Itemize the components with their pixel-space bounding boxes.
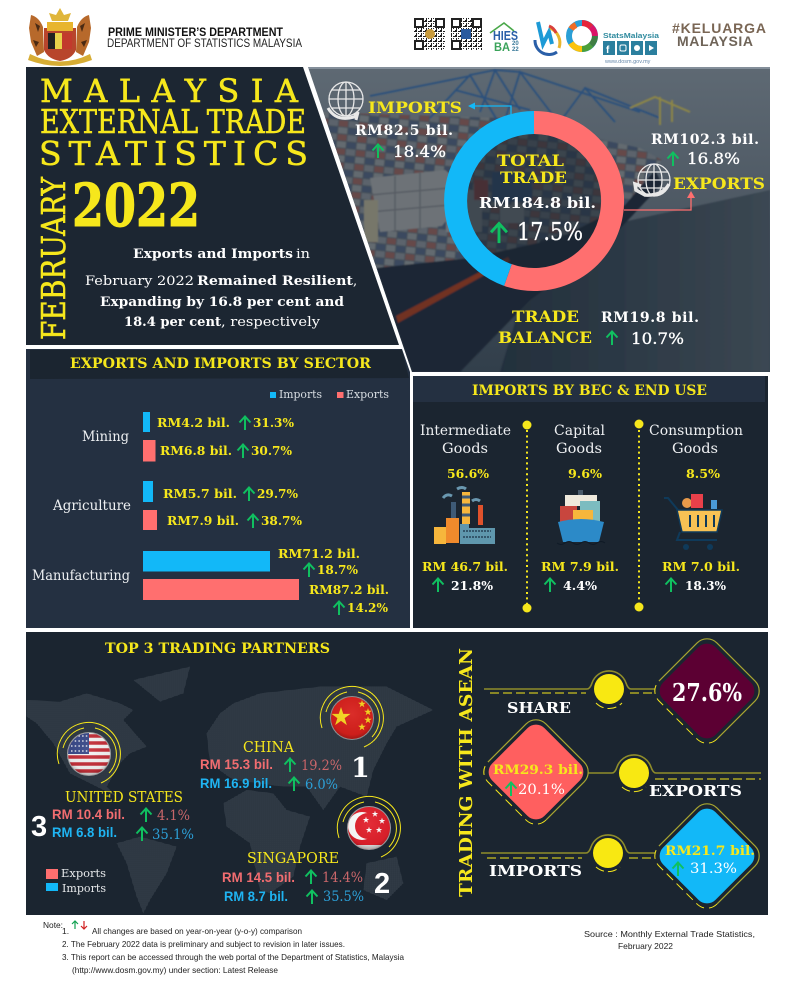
icon: cargo ship: [557, 490, 605, 544]
arrow: imports connector: [468, 102, 511, 116]
text block: hero summary: Expanding by 16.8 per cent and: [100, 295, 344, 310]
bar chart: manufacturing: RM71.2 bil.: [278, 547, 360, 561]
sector header band: [30, 350, 409, 379]
legend: exports and imports: Imports: [62, 882, 106, 895]
icon: Singapore flag: [337, 796, 400, 857]
panel: hero title background: [26, 67, 399, 345]
text block: trade balance: [498, 307, 699, 348]
text block: trade balance: TRADE: [512, 307, 579, 326]
text block: source: [584, 929, 755, 951]
heading: top 3 trading partners: TOP 3 TRADING PARTNERS: [105, 641, 330, 657]
chart: total trade donut: [456, 122, 613, 279]
divider 2: [634, 420, 644, 612]
text block: China: 6.0%: [305, 777, 338, 793]
text block: trade balance: BALANCE: [498, 328, 592, 347]
BEC heading: IMPORTS BY BEC & END USE: [472, 383, 707, 399]
text block: United States: 3: [31, 811, 47, 843]
text block: notes: All changes are based on year-on-year (y-o-y) comparison: [92, 926, 302, 936]
text block: Singapore: SINGAPORE: [247, 851, 339, 867]
title: Malaysia external trade statistics: STATISTICS: [39, 134, 308, 173]
icon: China flag: [320, 686, 383, 747]
title: year 2022: 2022: [72, 171, 200, 240]
text block: United States: RM 10.4 bil.: [52, 806, 125, 822]
column: consumption goods: RM 7.0 bil.: [662, 559, 740, 574]
column: capital goods: [541, 423, 619, 593]
column: intermediate goods: Intermediate: [420, 423, 511, 439]
header: QR code 1: [414, 18, 445, 50]
bar chart: manufacturing: RM87.2 bil.: [309, 583, 389, 597]
bar chart: manufacturing: [143, 547, 389, 615]
text block: Singapore: 14.4%: [322, 870, 363, 886]
bar chart: mining: 31.3%: [253, 416, 295, 430]
sector category labels: [32, 429, 131, 584]
ASEAN: imports row: RM21.7 bil.: [665, 844, 755, 859]
header: Keluarga Malaysia logo: [672, 20, 766, 49]
text block: source: Source : Monthly External Trade Statistics,: [584, 929, 755, 939]
text block: notes: Note:: [43, 920, 63, 930]
arrow: exports connector: [624, 191, 695, 210]
text block: notes: [43, 920, 404, 975]
column: capital goods: RM 7.9 bil.: [541, 559, 619, 574]
header: HIES BA logo: BA: [494, 40, 510, 54]
ASEAN: share row: SHARE: [507, 699, 571, 717]
column: consumption goods: Consumption: [649, 423, 743, 439]
text block: China: RM 15.3 bil.: [200, 756, 273, 772]
bar chart: agriculture: 38.7%: [261, 514, 303, 528]
text block: notes: 3. This report can be accessed through the web portal of the Department of Statistics, Malaysia: [62, 952, 404, 962]
title: February vertical label: FEBRUARY: [34, 176, 73, 340]
text block: United States: 4.1%: [157, 808, 190, 824]
bar chart: manufacturing: 14.2%: [347, 601, 389, 615]
ASEAN: imports row: [481, 798, 765, 914]
bar chart: agriculture: RM7.9 bil.: [167, 514, 239, 528]
text block: China: 1: [351, 753, 370, 784]
header: StatsMalaysia social logo: [603, 33, 659, 65]
text block: United States: [31, 790, 194, 843]
divider 1: [522, 420, 532, 612]
header: QR code 2: [451, 18, 482, 50]
header: StatsMalaysia social logo: f: [606, 45, 610, 56]
text block: exports value: [651, 132, 765, 193]
text block: Singapore: 2: [374, 868, 390, 900]
ASEAN: share row: [484, 633, 765, 749]
icon: factory: [434, 488, 495, 544]
header: HIES BA logo: 20: [512, 41, 519, 47]
column: capital goods: Capital: [554, 423, 605, 439]
text block: hero summary: in: [296, 247, 311, 262]
column: capital goods: 9.6%: [568, 466, 602, 481]
text block: China: 19.2%: [301, 758, 342, 774]
bar chart: mining: [143, 412, 295, 462]
text block: hero summary: ,: [353, 274, 357, 289]
text block: exports value: EXPORTS: [673, 174, 765, 193]
bar chart: agriculture: 29.7%: [257, 487, 299, 501]
text block: source: February 2022: [618, 941, 673, 951]
legend: exports and imports: [46, 867, 106, 895]
sector category labels: Manufacturing: [32, 568, 130, 584]
header: organisation names: [107, 27, 302, 50]
ASEAN: exports row: [478, 714, 761, 830]
heading: trading with ASEAN: TRADING WITH ASEAN: [456, 648, 477, 897]
title: Malaysia external trade statistics: EXTERNAL TRADE: [40, 102, 306, 141]
text block: notes: (http://www.dosm.gov.my) under section: Latest Release: [72, 965, 278, 975]
column: consumption goods: Goods: [672, 441, 718, 457]
text block: hero summary: February 2022: [85, 274, 194, 289]
panel: imports by BEC and end use: [413, 376, 768, 628]
text block: hero summary: Exports and Imports: [133, 247, 293, 262]
text block: imports value: 18.4%: [393, 143, 446, 161]
text block: China: [200, 740, 370, 793]
column: capital goods: 4.4%: [563, 578, 597, 593]
panel: port photo background: [300, 60, 780, 380]
header: organisation names: PRIME MINISTER’S DEPARTMENT: [108, 27, 283, 39]
bar chart: mining: 30.7%: [251, 444, 293, 458]
text block: hero summary: Remained Resilient: [197, 274, 353, 289]
ASEAN: imports row: 31.3%: [690, 861, 737, 877]
column: consumption goods: 18.3%: [685, 578, 726, 593]
sector legend: Exports: [346, 388, 389, 401]
ASEAN: exports row: 20.1%: [518, 782, 565, 798]
column: intermediate goods: 21.8%: [451, 578, 493, 593]
header: Keluarga Malaysia logo: MALAYSIA: [677, 33, 753, 49]
header: HIES BA logo: 22: [512, 47, 519, 53]
column: consumption goods: 8.5%: [686, 466, 720, 481]
text block: trade balance: 10.7%: [631, 330, 684, 348]
text block: trade balance: RM19.8 bil.: [601, 310, 699, 326]
title: Malaysia external trade statistics: MALAYSIA: [40, 72, 299, 110]
ASEAN: exports row: EXPORTS: [649, 782, 742, 800]
title: Malaysia external trade statistics: [39, 72, 308, 173]
text block: United States: 35.1%: [152, 827, 194, 843]
text block: Singapore: RM 14.5 bil.: [222, 869, 295, 885]
header: SDG wheel: [569, 23, 595, 49]
sector heading: EXPORTS AND IMPORTS BY SECTOR: [70, 356, 372, 372]
header: StatsMalaysia social logo: StatsMalaysia: [603, 33, 659, 40]
icon: shopping cart: [664, 494, 722, 550]
ASEAN: exports row: RM29.3 bil.: [493, 763, 583, 778]
bar chart: agriculture: RM5.7 bil.: [163, 487, 237, 501]
text block: hero summary: , respectively: [221, 315, 321, 330]
chart: dotted world map: [27, 667, 433, 913]
sector legend: Imports: [279, 388, 322, 401]
text block: imports value: RM82.5 bil.: [355, 123, 453, 139]
column: intermediate goods: [420, 423, 511, 593]
column: intermediate goods: 56.6%: [447, 466, 489, 481]
ASEAN: share row: 27.6%: [672, 678, 742, 707]
column: intermediate goods: RM 46.7 bil.: [422, 559, 508, 574]
header: coat of arms: [28, 8, 92, 66]
text block: exports value: RM102.3 bil.: [651, 132, 759, 148]
text block: total trade: TRADE: [500, 168, 567, 187]
text block: total trade: TOTAL: [497, 151, 564, 170]
text block: hero summary: 18.4 per cent: [124, 315, 221, 330]
text block: China: RM 16.9 bil.: [200, 775, 272, 791]
text block: United States: RM 6.8 bil.: [52, 824, 117, 840]
text block: imports value: IMPORTS: [368, 98, 462, 117]
text block: hero summary: [85, 247, 357, 330]
sector category labels: Agriculture: [52, 498, 131, 514]
panel: exports and imports by sector: [26, 349, 410, 628]
text block: exports value: 16.8%: [687, 150, 740, 168]
icon: exports globe: [635, 164, 670, 196]
header: hand logo: [535, 22, 560, 55]
text block: total trade: [479, 151, 596, 246]
bar chart: agriculture: [143, 481, 303, 530]
icon: imports globe: [328, 82, 363, 120]
text block: Singapore: [222, 851, 390, 905]
bar chart: manufacturing: 18.7%: [317, 563, 359, 577]
header: HIES BA logo: HIES: [493, 28, 518, 43]
bar chart: mining: RM6.8 bil.: [160, 444, 232, 458]
BEC header band: [413, 376, 765, 402]
text block: Singapore: RM 8.7 bil.: [224, 888, 288, 904]
text block: China: CHINA: [243, 740, 294, 756]
text block: United States: UNITED STATES: [65, 790, 183, 806]
header: Keluarga Malaysia logo: #KELUARGA: [672, 20, 766, 36]
text block: Singapore: 35.5%: [323, 889, 364, 905]
text block: notes: 1.: [62, 926, 69, 936]
bar chart: mining: RM4.2 bil.: [157, 416, 230, 430]
text block: imports value: [355, 98, 462, 161]
column: intermediate goods: Goods: [442, 441, 488, 457]
column: consumption goods: [649, 423, 743, 593]
header: HIES BA logo: [490, 23, 519, 54]
legend: exports and imports: Exports: [61, 867, 106, 880]
ASEAN: imports row: IMPORTS: [489, 862, 582, 880]
text block: notes: 2. The February 2022 data is preliminary and subject to revision in later issues.: [62, 939, 345, 949]
header: organisation names: DEPARTMENT OF STATISTICS MALAYSIA: [107, 38, 302, 50]
column: capital goods: Goods: [556, 441, 602, 457]
icon: United States flag: [57, 722, 120, 783]
header: StatsMalaysia social logo: www.dosm.gov.my: [604, 59, 651, 65]
text block: total trade: 17.5%: [517, 218, 583, 246]
panel: bottom dark background: [26, 632, 768, 915]
sector legend: [270, 388, 389, 401]
sector category labels: Mining: [82, 429, 129, 445]
text block: total trade: RM184.8 bil.: [479, 194, 596, 212]
